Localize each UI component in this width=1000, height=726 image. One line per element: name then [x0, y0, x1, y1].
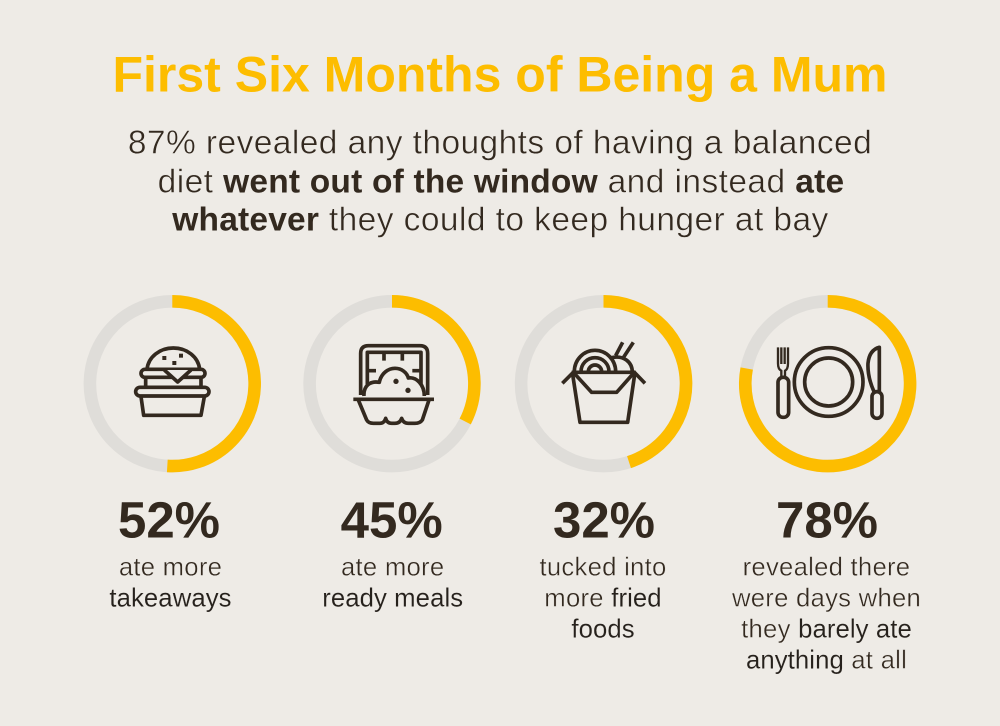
icon: ready meal tray — [353, 346, 434, 423]
donut chart: 52% — [90, 301, 255, 466]
caption: tucked into — [540, 554, 666, 582]
panel: takeaways — [90, 301, 255, 612]
donut chart: 32% — [521, 301, 686, 466]
panel: ready meals — [310, 301, 474, 612]
caption: takeaways — [109, 584, 232, 612]
caption: foods — [571, 616, 635, 644]
percentage: 52% — [118, 492, 220, 549]
caption: they barely ate — [741, 616, 912, 644]
icon: plate and cutlery — [778, 347, 882, 418]
percentage: 32% — [553, 492, 655, 549]
caption — [109, 554, 232, 612]
caption — [322, 554, 463, 612]
caption: anything at all — [746, 646, 907, 674]
caption: ate more — [119, 554, 222, 582]
donut chart: 45% — [310, 301, 474, 466]
donut chart: 78% — [745, 301, 910, 466]
percentage: 45% — [341, 492, 443, 549]
title: First Six Months of Being a Mum — [112, 47, 888, 103]
caption — [540, 554, 666, 644]
panel: barely ate — [731, 301, 921, 674]
caption: ready meals — [322, 584, 463, 612]
icon: noodle box — [562, 342, 645, 422]
intro text — [128, 124, 872, 239]
caption: ate more — [341, 554, 444, 582]
intro text: whatever they could to keep hunger at bay — [171, 202, 829, 239]
caption: revealed there — [743, 554, 910, 582]
caption — [731, 554, 921, 674]
panel: fried foods — [521, 301, 686, 644]
intro text: diet went out of the window and instead ate — [158, 163, 844, 200]
intro text: 87% revealed any thoughts of having a balanced — [128, 124, 872, 161]
caption: more fried — [544, 584, 662, 612]
percentage: 78% — [776, 492, 878, 549]
icon: burger — [136, 348, 209, 415]
caption: were days when — [731, 584, 921, 612]
